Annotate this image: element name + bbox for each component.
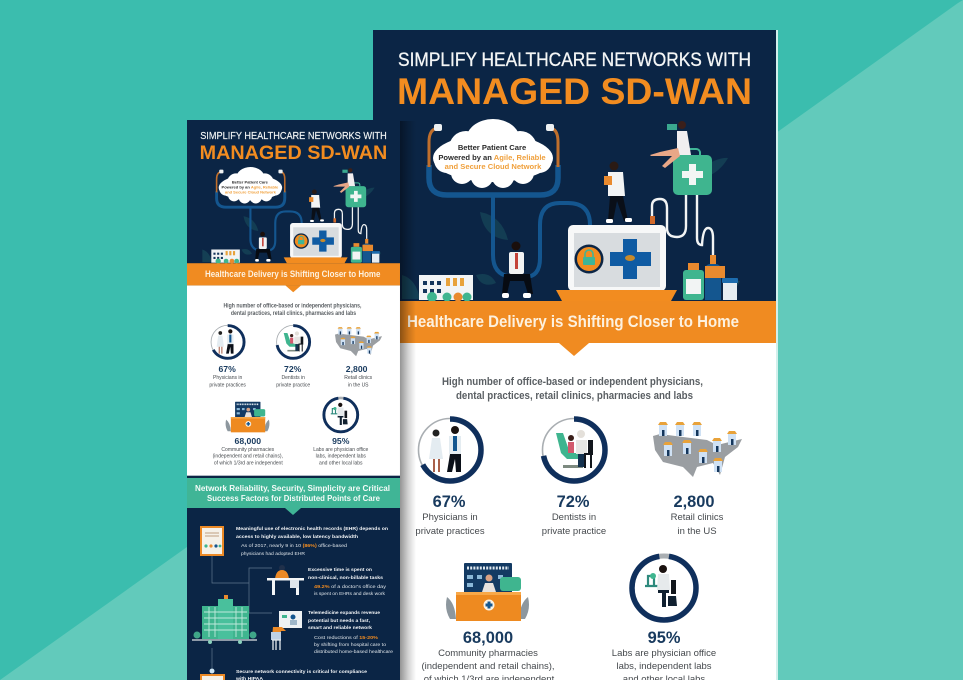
text: excessive time: non-clinical, non-billable tasks bbox=[308, 575, 383, 580]
stat: physicians 67%: private practices bbox=[415, 526, 485, 537]
stat: pharmacies: 68,000 bbox=[463, 629, 513, 647]
hero illustration bbox=[402, 119, 740, 302]
stat: pharmacies: (independent and retail chains), bbox=[421, 661, 555, 672]
text: EHR: Meaningful use of electronic health records (EHR) depends on bbox=[236, 526, 388, 531]
cloud message bbox=[438, 143, 546, 171]
text: EHR: As of 2017, nearly 9 in 10 (86%) office-based bbox=[241, 543, 348, 548]
text: EHR: access to highly available, low latency bandwidth bbox=[236, 534, 358, 539]
stat: pharmacies: Community pharmacies bbox=[438, 648, 538, 659]
small stat: labs: Labs are physician office bbox=[313, 447, 369, 453]
stat: labs 95%: Labs are physician office bbox=[612, 648, 716, 659]
text: compliance bbox=[235, 669, 367, 680]
small orange band bbox=[187, 263, 400, 285]
title line two: MANAGED SD-WAN bbox=[397, 70, 752, 112]
small title line one: SIMPLIFY HEALTHCARE NETWORKS WITH bbox=[200, 131, 387, 142]
small stat: pharmacies: 68,000 bbox=[235, 436, 261, 446]
small stat: dentists bbox=[276, 325, 310, 388]
icon: EHR document bbox=[200, 526, 224, 556]
small stat: physicians: 67% bbox=[219, 364, 236, 374]
small stat: retail clinics: 2,800 bbox=[346, 364, 368, 374]
intro text: High number of office-based or independent physicians, bbox=[442, 376, 703, 388]
small cloud message: Powered by an Agile, Reliable bbox=[222, 185, 279, 190]
text: telemedicine: by shifting from hospital care to bbox=[314, 642, 387, 647]
small stat: physicians: Physicians in bbox=[213, 375, 243, 381]
background light diagonal bottom left bbox=[0, 547, 187, 680]
stat: dentists 72%: 72% bbox=[557, 493, 590, 511]
icon: desk worker bbox=[267, 565, 304, 595]
stat: retail clinics map: 2,800 bbox=[673, 493, 715, 511]
text: EHR bbox=[236, 526, 388, 556]
large panel base bbox=[373, 30, 776, 680]
green section band bbox=[187, 478, 400, 508]
text: excessive time bbox=[308, 567, 387, 596]
stat: pharmacies bbox=[421, 563, 555, 680]
stat: labs 95%: labs, independent labs bbox=[616, 661, 712, 672]
icon: telemedicine bbox=[271, 611, 302, 650]
small stat: labs: labs, independent labs bbox=[316, 454, 366, 460]
text: excessive time: 49.2% of a doctor's office day bbox=[314, 584, 387, 589]
small intro text bbox=[223, 304, 362, 317]
small stat: dentists: private practice bbox=[276, 382, 310, 388]
small intro text: High number of office-based or independent physicians, bbox=[223, 304, 362, 310]
stat: physicians 67%: Physicians in bbox=[422, 512, 478, 523]
stat: labs 95% bbox=[612, 556, 716, 680]
small white area bbox=[187, 285, 400, 476]
white content area bbox=[373, 343, 776, 680]
green band heading bbox=[195, 483, 390, 503]
small stat: labs bbox=[313, 398, 369, 467]
small band heading: Healthcare Delivery is Shifting Closer to Home bbox=[205, 269, 381, 279]
band heading: Healthcare Delivery is Shifting Closer to Home bbox=[407, 313, 739, 331]
small stat: pharmacies bbox=[213, 402, 283, 467]
small stat: retail clinics: Retail clinics bbox=[344, 375, 373, 381]
navy lower section bbox=[187, 506, 400, 680]
intro text bbox=[442, 376, 703, 402]
panel: large infographic page bbox=[373, 30, 778, 680]
background light diagonal top right bbox=[776, 0, 963, 680]
stat: labs 95%: 95% bbox=[648, 629, 681, 647]
stat: dentists 72% bbox=[542, 418, 606, 537]
small stat: pharmacies: (independent and retail chains), bbox=[213, 454, 283, 460]
title line one: SIMPLIFY HEALTHCARE NETWORKS WITH bbox=[398, 50, 751, 71]
small stat: physicians bbox=[209, 325, 246, 388]
small cloud message bbox=[222, 179, 279, 194]
green band heading: Network Reliability, Security, Simplicity are Critical bbox=[195, 483, 390, 493]
text: telemedicine: smart and reliable network bbox=[308, 625, 372, 630]
band pointer bbox=[559, 343, 589, 356]
text: compliance: Secure network connectivity is critical for compliance bbox=[236, 669, 367, 674]
stat: retail clinics map bbox=[653, 422, 742, 537]
green band pointer bbox=[285, 508, 301, 515]
text: telemedicine: Telemedicine expands revenue bbox=[308, 610, 380, 615]
small stat: retail clinics bbox=[335, 327, 382, 388]
text: telemedicine: distributed home-based healthcare bbox=[314, 649, 394, 654]
stat: physicians 67% bbox=[415, 418, 485, 537]
small cloud message: Better Patient Care bbox=[232, 179, 269, 184]
cloud message: and Secure Cloud Network bbox=[445, 162, 542, 171]
icon: compliance document bbox=[200, 668, 225, 680]
stat: retail clinics map: Retail clinics bbox=[671, 512, 724, 523]
small stat: dentists: 72% bbox=[284, 364, 302, 374]
stat: dentists 72%: Dentists in bbox=[552, 512, 596, 523]
small stat: pharmacies: of which 1/3rd are independent bbox=[214, 461, 283, 467]
stat: retail clinics map: in the US bbox=[677, 526, 717, 537]
icon: hospital bbox=[192, 595, 257, 644]
small band pointer bbox=[285, 285, 301, 292]
orange section band bbox=[373, 301, 776, 343]
connector lines bbox=[212, 556, 272, 668]
small hero illustration bbox=[202, 167, 381, 264]
green band heading: Success Factors for Distributed Points of Care bbox=[207, 493, 380, 503]
small stat: labs: 95% bbox=[332, 436, 350, 446]
panel: small infographic page bbox=[187, 120, 400, 680]
text: telemedicine bbox=[308, 610, 394, 654]
text: excessive time: is spent on EHRs and desk work bbox=[314, 591, 386, 596]
text: excessive time: Excessive time is spent on bbox=[308, 567, 372, 572]
small stat: dentists: Dentists in bbox=[282, 375, 305, 381]
small intro text: dental practices, retail clinics, pharmacies and labs bbox=[231, 311, 357, 317]
text: telemedicine: Cost reductions of 15-20% bbox=[314, 635, 378, 640]
stat: physicians 67%: 67% bbox=[433, 493, 466, 511]
intro text: dental practices, retail clinics, pharmacies and labs bbox=[456, 390, 693, 402]
stat: dentists 72%: private practice bbox=[542, 526, 606, 537]
small cloud message: and Secure Cloud Network bbox=[225, 189, 277, 194]
right edge highlight bbox=[776, 30, 778, 680]
small stat: physicians: private practices bbox=[209, 382, 246, 388]
small panel shadow bbox=[400, 121, 416, 680]
text: EHR: physicians had adopted EHR bbox=[241, 551, 306, 556]
cloud message: Powered by an Agile, Reliable bbox=[438, 153, 546, 162]
small panel base bbox=[187, 120, 400, 680]
small stat: retail clinics: in the US bbox=[348, 382, 369, 388]
text: telemedicine: potential but needs a fast, bbox=[308, 618, 370, 623]
scaled copy of top content bbox=[187, 131, 400, 476]
small title line two: MANAGED SD-WAN bbox=[200, 142, 387, 164]
cloud message: Better Patient Care bbox=[458, 143, 526, 152]
small stat: labs: and other local labs bbox=[319, 461, 363, 467]
small stat: pharmacies: Community pharmacies bbox=[221, 447, 275, 453]
